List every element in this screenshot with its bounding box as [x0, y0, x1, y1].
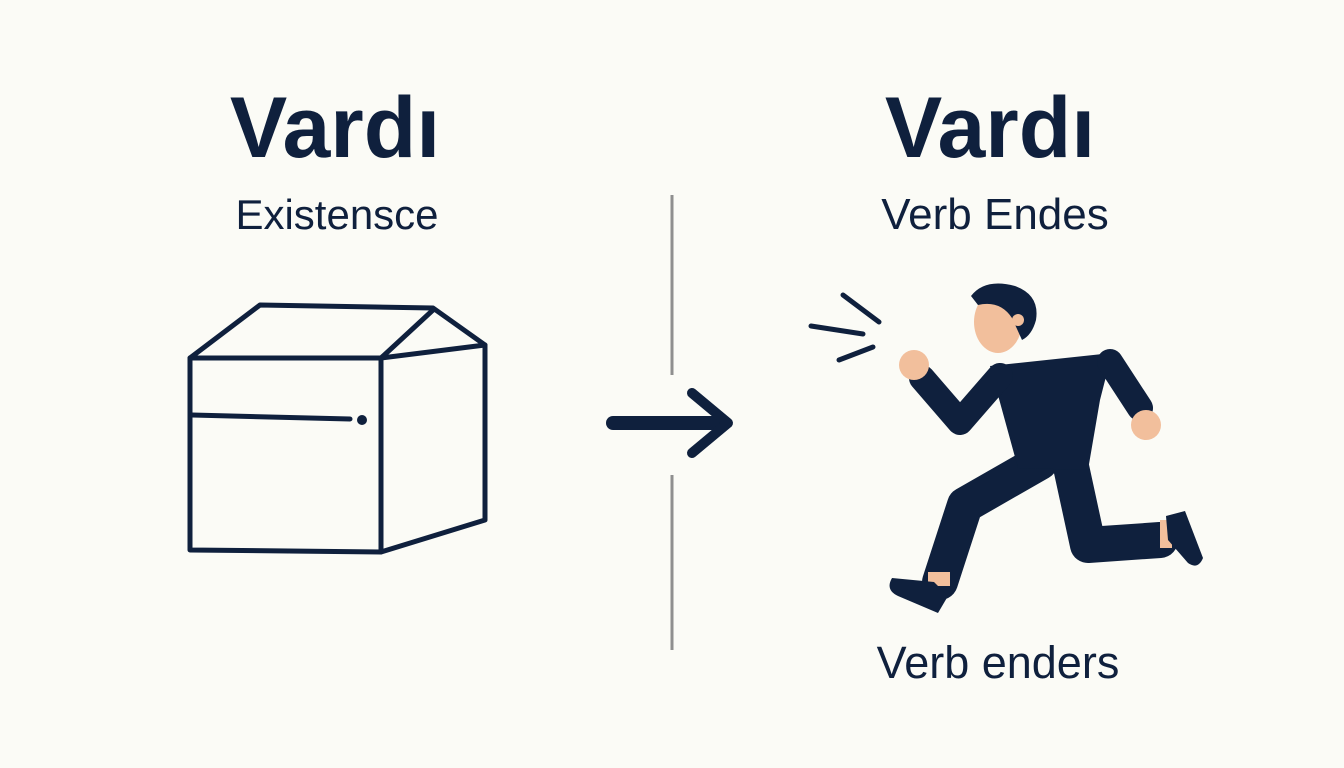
subtitle: Verb Endes: Verb Endes — [881, 190, 1109, 239]
arms — [922, 362, 1140, 422]
torso — [990, 353, 1112, 470]
title: right Vardı: Vardı — [885, 80, 1095, 176]
subtitle: Existensce: Existensce — [235, 191, 439, 238]
legs — [940, 462, 1160, 582]
icon: running person — [811, 284, 1203, 613]
arrow — [613, 393, 728, 453]
fists — [899, 350, 929, 380]
caption: Verb enders: Verb enders — [877, 637, 1119, 688]
title: left Vardı: Vardı — [230, 80, 440, 176]
shoes — [890, 578, 948, 613]
motion lines — [811, 295, 879, 360]
divider — [670, 195, 674, 650]
ankles — [928, 572, 950, 586]
head — [974, 291, 1022, 353]
icon: box — [190, 305, 485, 552]
